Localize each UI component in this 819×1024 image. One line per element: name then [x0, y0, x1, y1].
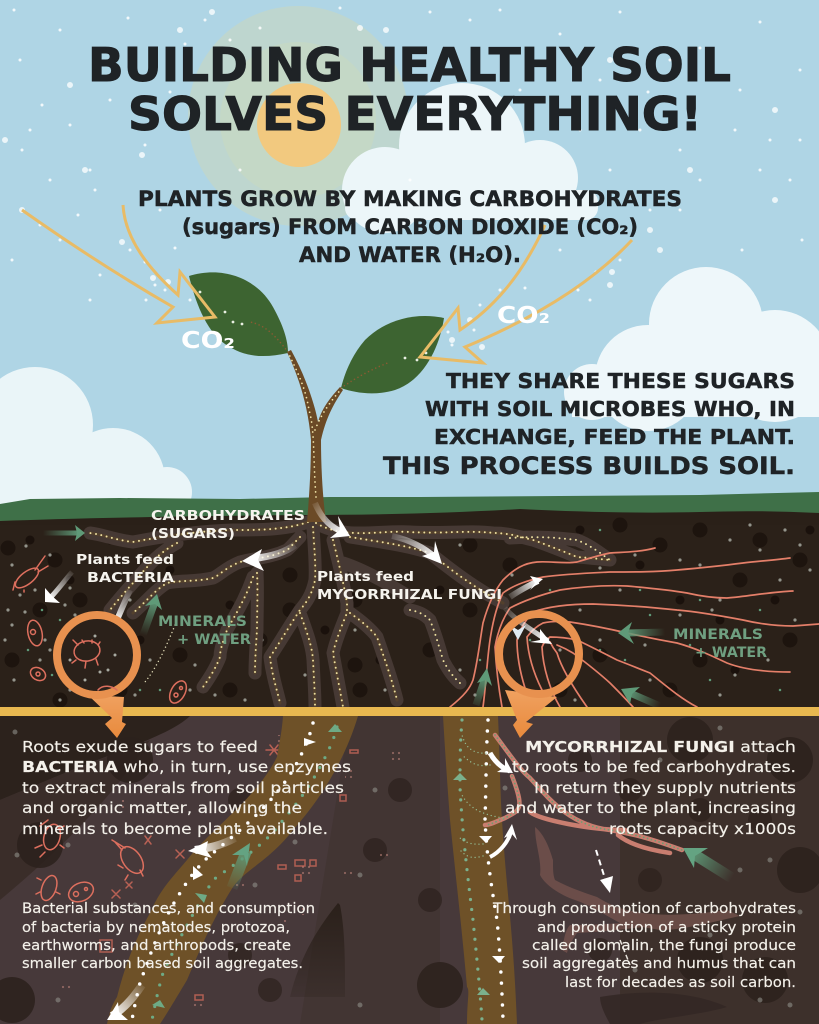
sky background [0, 0, 819, 510]
microbe: rod [36, 873, 60, 903]
text: fungal aggregates [492, 901, 796, 991]
white dotted sugar line [485, 720, 503, 1020]
label: co2 left: CO₂ [181, 328, 235, 354]
text: fungal aggregates: Through consumption of carbohydrates [492, 901, 796, 917]
text: mycorrhizal fungi explanation: roots capacity x1000s [609, 820, 796, 838]
intro text: photosynthesis: AND WATER (H₂O). [299, 243, 521, 267]
green arrows: minerals and water [43, 525, 732, 888]
green arrow: lower right [692, 853, 732, 878]
text: mycorrhizal fungi explanation: MYCORRHIZAL FUNGI attach [525, 738, 796, 756]
microbe: rod with flagella [112, 840, 148, 880]
white arrow: toward magnifier left [116, 590, 130, 622]
label: co2 right: CO₂ [497, 303, 550, 329]
label: minerals + water, right: + WATER [695, 645, 767, 661]
label: minerals + water, left: MINERALS [158, 614, 247, 630]
text: bacteria explanation: BACTERIA who, in turn, use enzymes [22, 758, 351, 776]
text: mycorrhizal fungi explanation: to roots to be fed carbohydrates. [512, 758, 796, 776]
label: plants feed bacteria: Plants feed [76, 553, 174, 568]
co2 particles entering leaves [200, 292, 426, 360]
lower soil dark blobs [12, 740, 800, 1000]
label: minerals + water, right [673, 627, 767, 661]
soil mineral particles, upper [5, 525, 810, 700]
label: minerals + water, right: MINERALS [673, 627, 763, 643]
leaf: right [341, 316, 444, 393]
intro text: photosynthesis [138, 187, 682, 267]
root halos [90, 520, 610, 707]
leaf: left [189, 272, 288, 356]
flow direction triangles [479, 836, 505, 963]
label: carbohydrates: (SUGARS) [151, 527, 235, 542]
soil dark blobs, upper [8, 525, 800, 700]
cloud: right [564, 267, 819, 431]
label: plants feed mycorrhizal fungi: Plants feed [317, 570, 414, 585]
green arrow: in magnifier [72, 622, 93, 631]
white arrows: carbohydrate flow [45, 503, 552, 1020]
text: sharing sugars: THIS PROCESS BUILDS SOIL. [383, 452, 795, 480]
upper root system: left and right branches [90, 520, 610, 707]
lower soil particles [15, 728, 800, 1005]
bacteria and microbes lower left [35, 735, 400, 1008]
label: plants feed mycorrhizal fungi: MYCORRHIZAL FUNGI [317, 588, 502, 603]
text: bacteria explanation: Roots exude sugars to feed [22, 738, 258, 756]
text: mycorrhizal fungi explanation [505, 738, 796, 838]
text: mycorrhizal fungi explanation: and water to the plant, increasing [505, 799, 796, 817]
root cores [90, 520, 610, 707]
microbe: rod top left [12, 556, 48, 592]
microbe: oval mid left [25, 619, 45, 647]
text: bacteria explanation: and organic matter, allowing the [22, 799, 302, 817]
magnifier: left [57, 615, 137, 738]
leaf veins: sugar dots [250, 322, 390, 388]
text: sharing sugars: EXCHANGE, FEED THE PLANT. [434, 425, 795, 449]
stem [287, 350, 343, 522]
label: plants feed bacteria [76, 553, 174, 586]
text: bacterial aggregates: Bacterial substances, and consumption [22, 901, 315, 917]
label: minerals + water, left: + WATER [177, 632, 251, 648]
ghost fungal hyphae, soil aggregates [535, 827, 740, 1024]
lower right root [443, 716, 517, 1024]
dashed white arrow: carbon to aggregates [596, 850, 630, 965]
white arrow: left branch [250, 545, 295, 560]
white arrow: lower root bottom [112, 985, 142, 1016]
green arrow: top left root [43, 530, 78, 536]
white arrow: fungi in magnifier [505, 608, 548, 641]
root dotted sugar flow [90, 520, 610, 707]
title: SOLVES EVERYTHING! [128, 87, 702, 141]
green arrow: right minerals [628, 632, 665, 633]
white arrow: lower root to fungus top [490, 753, 510, 771]
microbes: small ovals cluster [100, 750, 358, 1000]
title: BUILDING HEALTHY SOIL [88, 38, 731, 92]
text: fungal aggregates: called glomalin, the fungi produce [532, 938, 796, 954]
cloud: top center [342, 83, 598, 233]
text: sharing sugars [383, 369, 795, 480]
airborne white particles [12, 8, 802, 345]
white arrow: toward bacteria [50, 572, 72, 598]
intro text: photosynthesis: (sugars) FROM CARBON DIOXIDE (CO₂) [182, 215, 638, 239]
text: bacterial aggregates: of bacteria by nematodes, protozoa, [22, 920, 290, 936]
label: minerals + water, left [158, 614, 251, 648]
label: carbohydrates: CARBOHYDRATES [151, 509, 305, 524]
arrow: co2 left gold outline [22, 205, 215, 323]
yellow horizon divider [0, 707, 819, 716]
lower left root [107, 716, 358, 1024]
topsoil layer [0, 509, 819, 710]
white arrow: stem to right roots [315, 503, 343, 532]
text: bacteria explanation [22, 738, 351, 838]
text: sharing sugars: THEY SHARE THESE SUGARS [446, 369, 795, 393]
arrow: co2 right gold outline [420, 225, 632, 363]
faint dotted feed line toward bacteria [145, 625, 175, 682]
flow direction triangles [193, 738, 316, 880]
white dotted sugar line [132, 723, 313, 1020]
green arrow: lower left [232, 852, 246, 888]
title [88, 38, 731, 141]
microbe: small stars [112, 745, 282, 898]
white arrow: fungi out [510, 581, 538, 597]
white arrow: lower root to fungus bottom [490, 832, 511, 857]
text: bacteria explanation: minerals to become plant available. [22, 820, 328, 838]
cloud: left [0, 367, 192, 532]
text: bacterial aggregates: earthworms, and arthropods, create [22, 938, 291, 954]
text: bacterial aggregates [22, 901, 315, 972]
text: fungal aggregates: last for decades as soil carbon. [565, 975, 796, 991]
fungal hyphae network, upper [450, 548, 819, 707]
white arrow: lower root to bacteria [195, 838, 235, 850]
text: sharing sugars: WITH SOIL MICROBES WHO, IN [425, 397, 795, 421]
text: fungal aggregates: soil aggregates and humus that can [522, 956, 796, 972]
label: carbohydrates [151, 509, 305, 542]
microbe: spiky oval [35, 820, 64, 857]
white arrow: right branch [392, 536, 436, 558]
green arrow: toward left root [143, 602, 155, 635]
text: bacteria explanation: to extract minerals from soil particles [22, 779, 344, 797]
label: plants feed mycorrhizal fungi [317, 570, 502, 603]
green arrow: toward right root [476, 678, 485, 705]
lower soil background [0, 716, 819, 1024]
intro text: photosynthesis: PLANTS GROW BY MAKING CARBOHYDRATES [138, 187, 682, 211]
microbe inside magnifier [72, 639, 102, 668]
label: plants feed bacteria: BACTERIA [87, 571, 174, 586]
text: bacterial aggregates: smaller carbon based soil aggregates. [22, 956, 303, 972]
grass strip [0, 492, 819, 530]
green dotted mineral line [152, 727, 337, 1020]
text: mycorrhizal fungi explanation: In return they supply nutrients [534, 779, 796, 797]
green dotted mineral line [460, 720, 482, 1020]
fungal hypha on root, lower [460, 735, 682, 857]
green arrow: right lower [630, 693, 660, 706]
microbe: oval low left [28, 665, 48, 683]
magnifier: right [499, 614, 579, 738]
text: fungal aggregates: and production of a sticky protein [537, 920, 796, 936]
microbes: upper soil [12, 556, 190, 706]
microbe: oval by pin [166, 678, 190, 706]
sun [188, 6, 408, 226]
microbe: oval [65, 878, 97, 906]
